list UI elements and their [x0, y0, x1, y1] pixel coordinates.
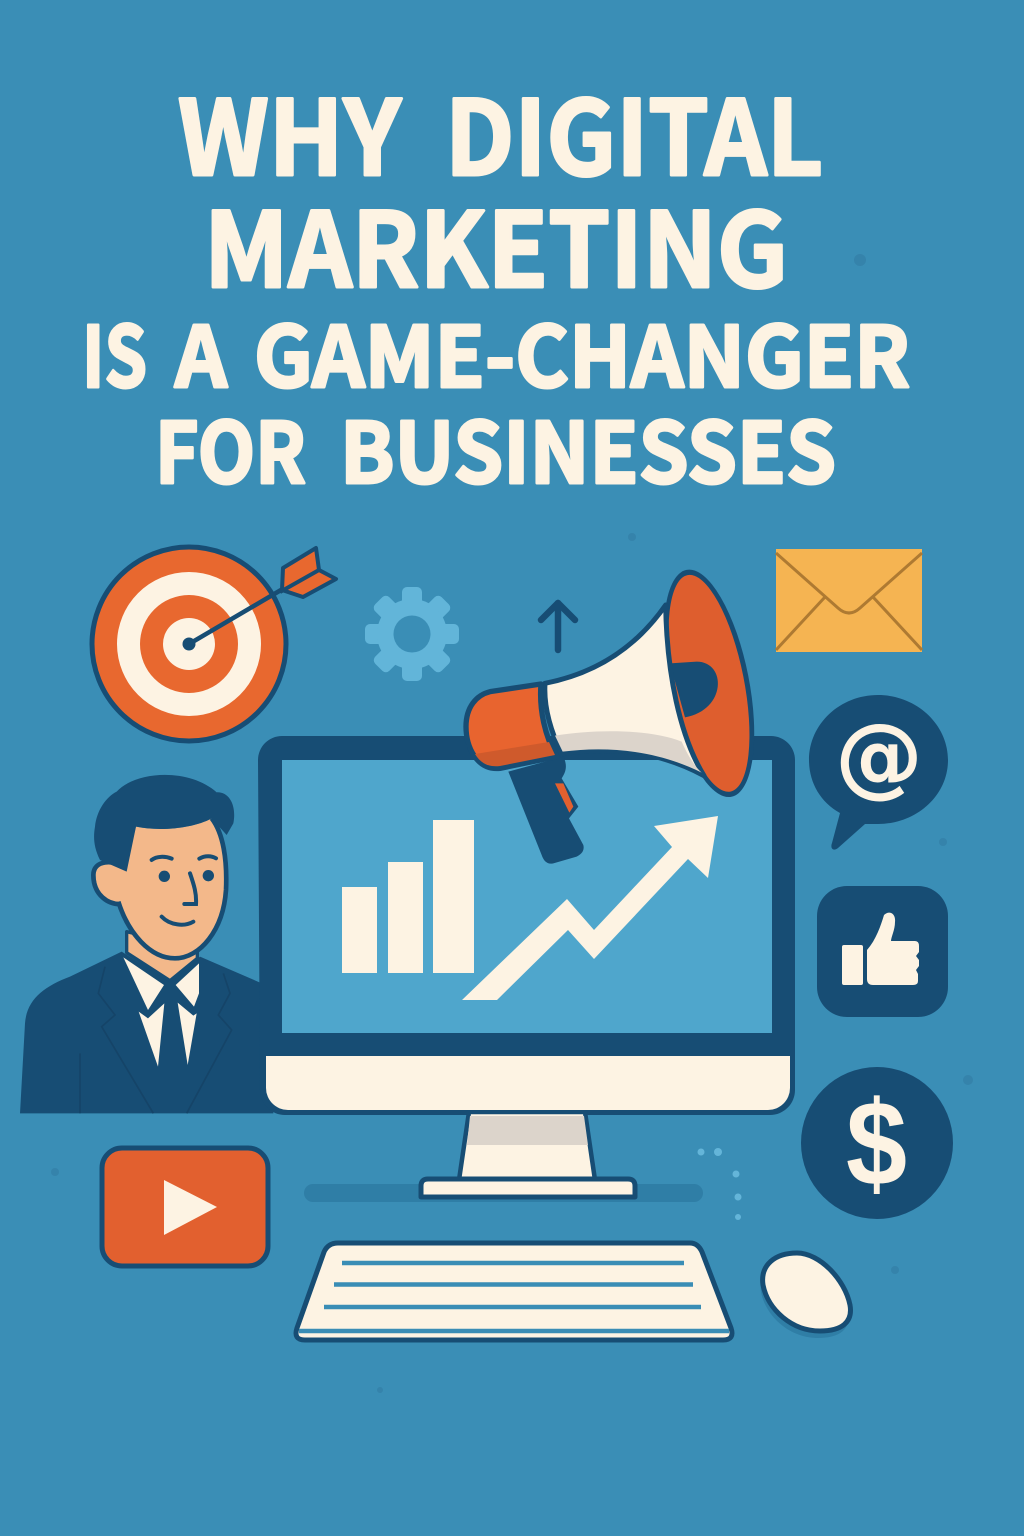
title: WHY	[178, 56, 402, 205]
icon: person in suit	[20, 775, 273, 1113]
mouse	[761, 1253, 850, 1338]
suit	[20, 952, 273, 1113]
icon: dollar circle	[801, 1067, 953, 1219]
stand	[459, 1112, 595, 1180]
thumbs up	[842, 913, 919, 985]
horn	[545, 605, 704, 776]
icon: gear	[365, 587, 459, 681]
monitor	[258, 736, 795, 1202]
stand shadow	[304, 1184, 703, 1202]
bar chart	[342, 820, 474, 973]
icon: megaphone	[466, 562, 771, 864]
icon: up arrow	[541, 603, 575, 650]
title: GAME-CHANGER	[254, 291, 910, 412]
hair	[94, 775, 234, 872]
neck	[127, 932, 197, 981]
icon: thumbs up tile	[817, 886, 948, 1017]
rear cap	[466, 684, 557, 768]
facial features	[152, 856, 216, 925]
decorative dots	[698, 1148, 742, 1220]
title: MARKETING	[204, 168, 788, 317]
shirt	[123, 957, 199, 1067]
screen	[282, 760, 772, 1033]
ear	[93, 862, 127, 904]
title: A	[174, 291, 228, 412]
stand base	[421, 1179, 635, 1197]
title: DIGITAL	[445, 56, 823, 205]
monitor chin	[266, 1056, 790, 1110]
icon: at-sign speech bubble: @	[835, 704, 923, 807]
icon: envelope	[776, 549, 922, 652]
screen bezel	[258, 736, 795, 1115]
growth arrow	[462, 816, 718, 1000]
keyboard	[296, 1243, 732, 1340]
title	[82, 56, 910, 508]
icon: target with arrow	[92, 547, 336, 741]
handle	[508, 757, 584, 864]
title: FOR	[155, 387, 306, 508]
icon: dollar circle: $	[846, 1075, 907, 1211]
icon: at-sign speech bubble	[809, 695, 948, 850]
icon: video play button	[102, 1148, 268, 1266]
title: IS	[82, 291, 147, 412]
face	[118, 818, 226, 958]
bell	[647, 562, 771, 805]
title: BUSINESSES	[340, 387, 836, 508]
